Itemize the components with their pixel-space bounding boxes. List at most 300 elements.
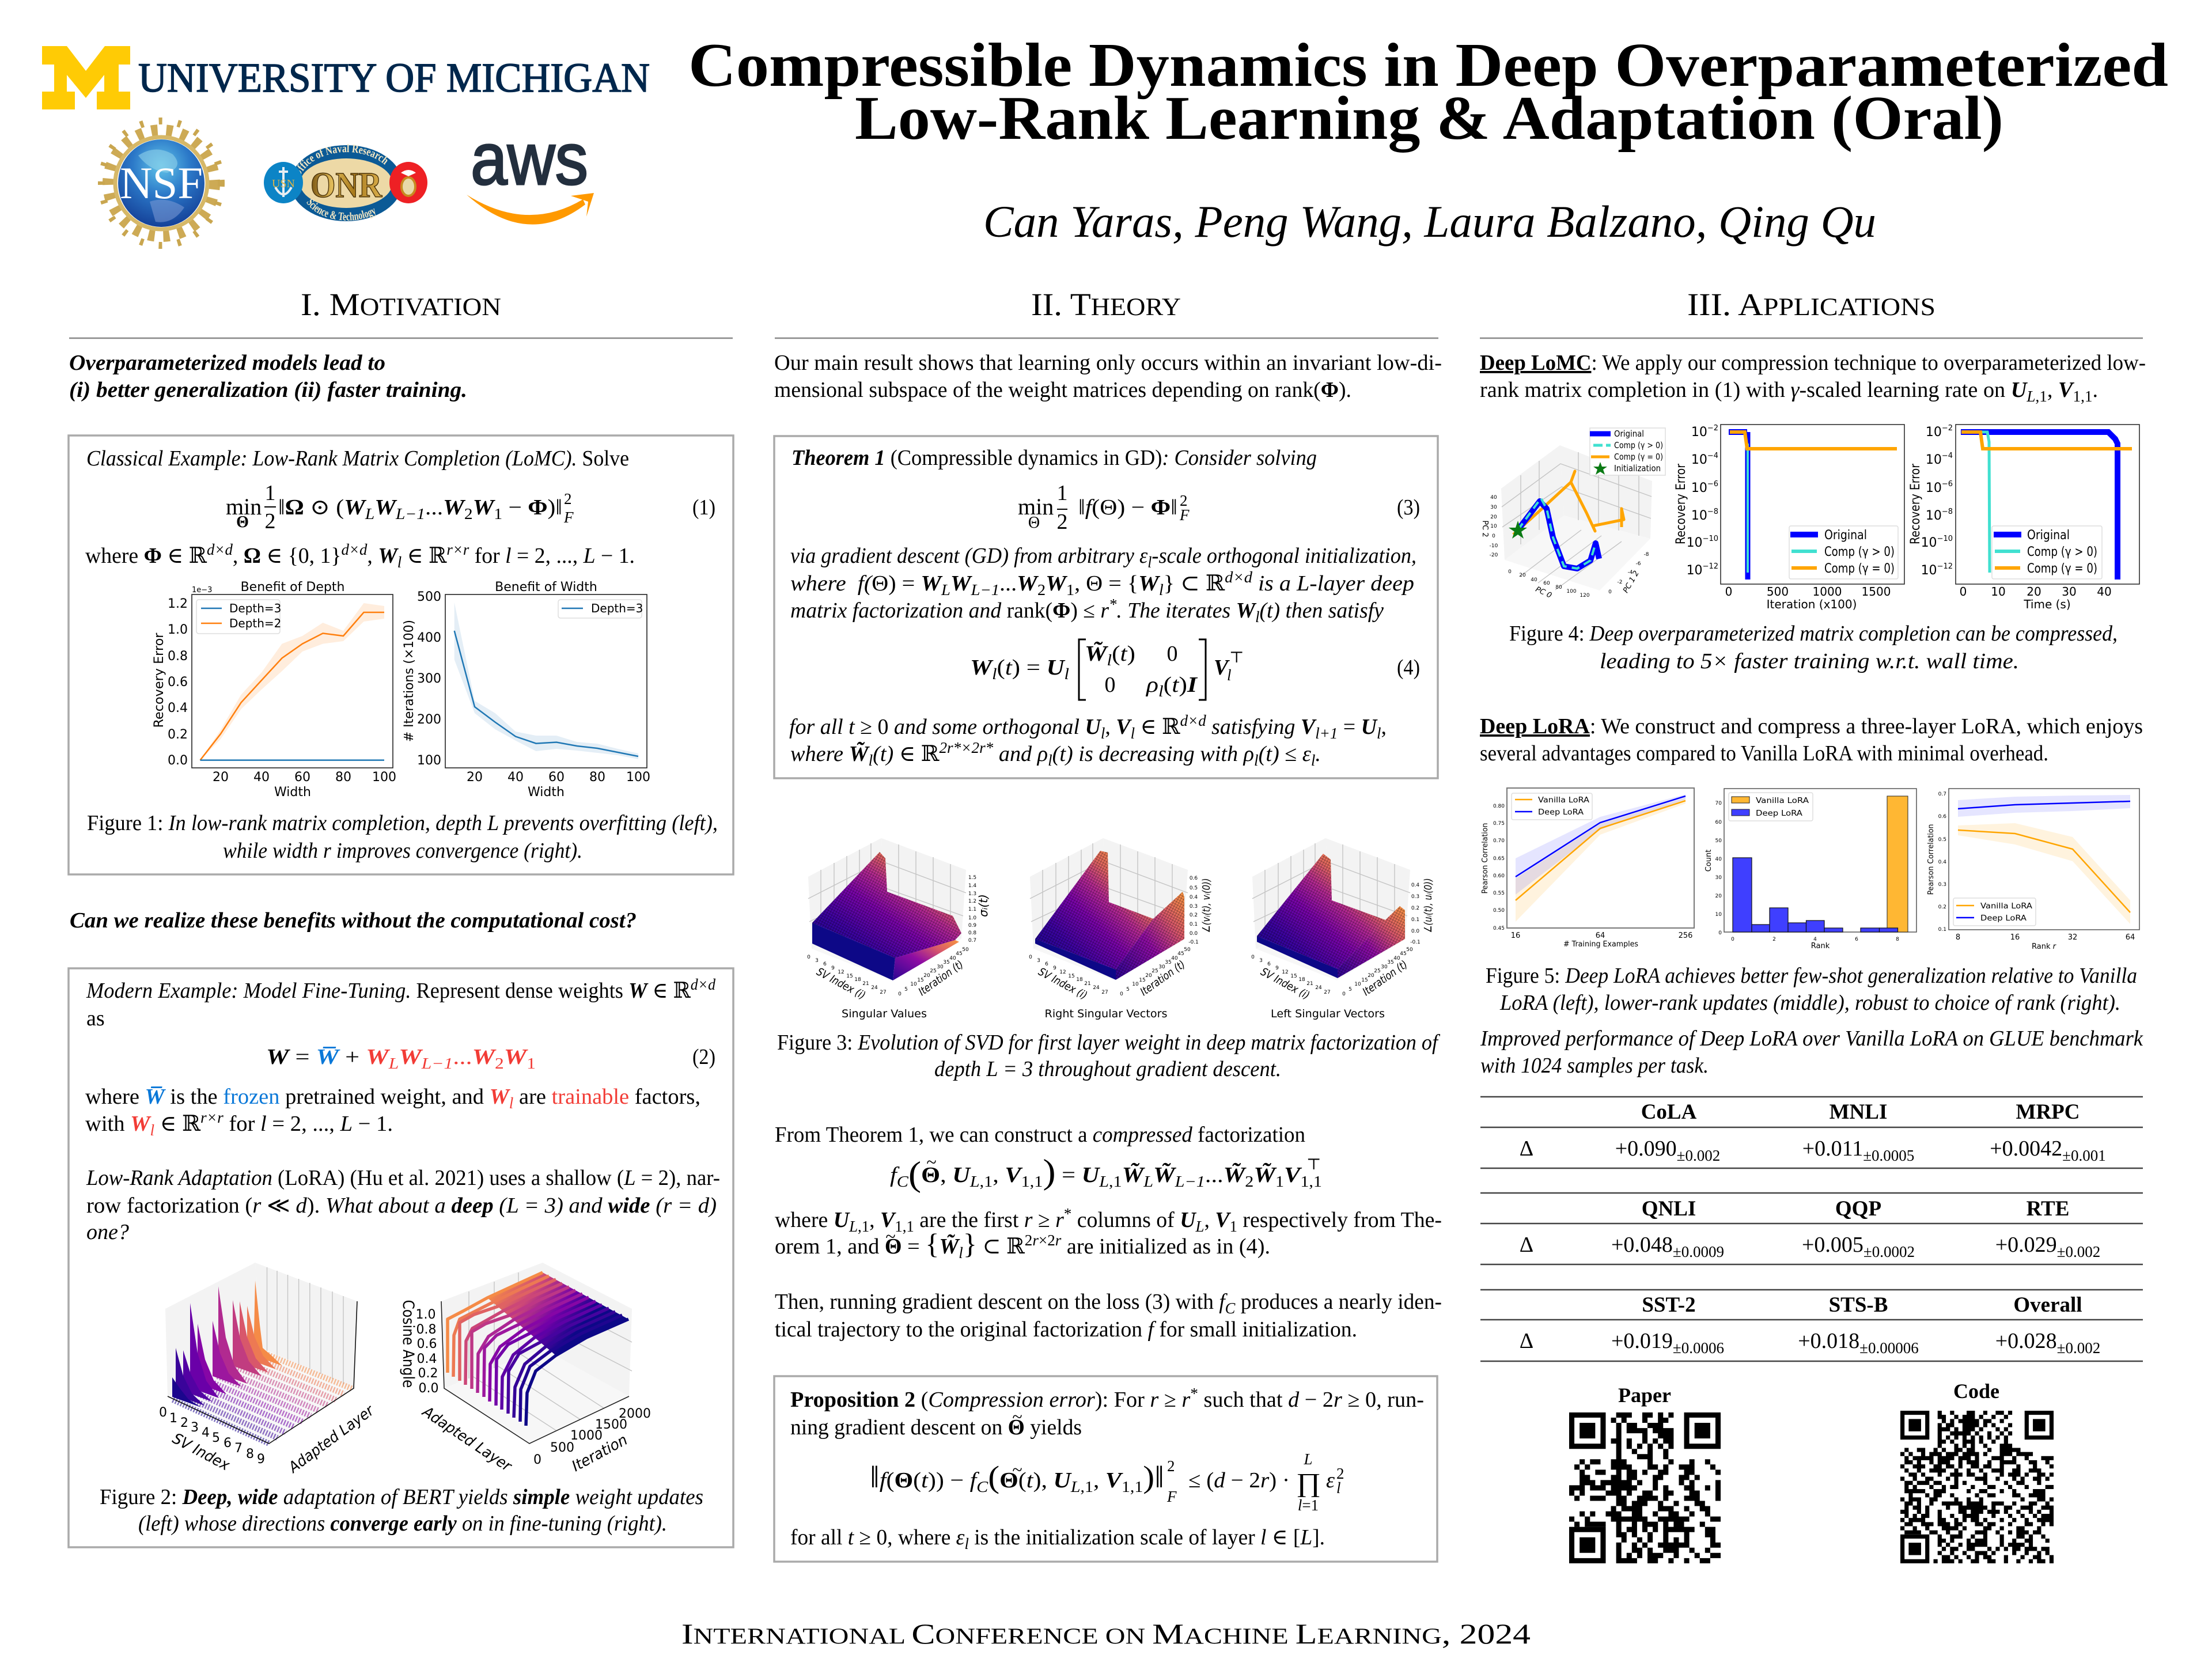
text block: main result <box>774 351 1442 402</box>
chart: 3D singular values of weight updates: 7 <box>234 1441 243 1456</box>
equation: compressed factorization: , <box>993 1163 1005 1187</box>
chart: rank histogram: 50 <box>1715 838 1722 844</box>
chart: 3D cosine angle over iterations: 0.8 <box>416 1323 437 1337</box>
chart: pearson vs training examples: 256 <box>1679 931 1692 940</box>
equation: compressed factorization: W̃ <box>1153 1163 1177 1187</box>
chart: singular values surface: 15 <box>846 974 853 979</box>
legend: Vanilla LoRA <box>1538 796 1589 805</box>
chart: left singular vectors surface: 0 <box>1251 955 1255 960</box>
chart: 3D cosine angle over iterations: 1500 <box>595 1418 627 1432</box>
chart: benefit of depth: 1.2 <box>168 597 188 611</box>
equation: compressed factorization: W̃ <box>1122 1163 1146 1187</box>
equation 4: t) = U <box>1005 656 1062 680</box>
legend: Original <box>1614 429 1644 439</box>
chart: recovery error vs time: 40 <box>2097 585 2112 599</box>
chart: right singular vectors surface: 15 <box>1068 974 1075 979</box>
equation 4: l <box>1227 666 1232 684</box>
chart: singular values surface: Singular Values <box>842 1007 927 1020</box>
chart: 3D cosine angle over iterations <box>399 1263 651 1476</box>
equation: compression error bound: ε <box>1326 1468 1335 1493</box>
chart: right singular vectors surface: 10 <box>1132 982 1139 987</box>
caption: figure 3: Figure 3: Evolution of SVD for first layer weight in deep matrix factorization of <box>777 1031 1440 1055</box>
chart: recovery error vs iteration: 10 <box>1687 536 1703 550</box>
chart: left singular vectors surface: 12 <box>1282 969 1289 975</box>
chart: recovery error vs time: −2 <box>1942 424 1953 433</box>
chart: singular values surface: 0 <box>807 955 810 960</box>
theorem conclusion: , <box>1381 715 1387 739</box>
text block: where: r ≥ r <box>1024 1208 1064 1232</box>
text block: where: ,1 <box>858 1218 869 1235</box>
equation 4: 0 <box>1167 642 1177 666</box>
theorem conclusion: and ρ <box>993 742 1048 766</box>
text block: where: where U <box>775 1208 849 1232</box>
equation 1: − <box>502 495 528 520</box>
equation: compression error bound: ≤ (d − 2r) · <box>1188 1468 1290 1493</box>
equation 1: 2 <box>464 505 473 522</box>
equation: compressed factorization: L <box>1143 1173 1153 1190</box>
caption: figure 5: Figure 5: Deep LoRA achieves better few-shot generalization relative to Vanilla <box>1486 964 2137 988</box>
theorem conclusion: ≤ ε <box>1285 742 1311 766</box>
text block: LoRA: Low-Rank Adaptation (LoRA) (Hu et al. 2021) uses a shallow (L = 2), nar- <box>86 1166 720 1190</box>
legend: Deep LoRA <box>1756 809 1802 818</box>
chart: 3D singular values of weight updates <box>159 1263 378 1477</box>
equation 2: L <box>388 1055 399 1072</box>
equation: compression error bound: 2 <box>1336 1465 1344 1482</box>
chart: right singular vectors surface: 3 <box>1037 958 1040 964</box>
chart: right singular vectors surface: 0 <box>1120 991 1123 997</box>
chart: recovery error vs time: −10 <box>1937 535 1953 543</box>
text block: where: L <box>1195 1218 1204 1235</box>
chart: 3D singular values of weight updates: SV Index <box>169 1430 233 1475</box>
theorem text: via gradient descent (GD) from arbitrary ε <box>790 544 1165 568</box>
chart: singular values surface: 3 <box>815 958 819 964</box>
chart: rank histogram: Count <box>1705 850 1713 872</box>
legend <box>1992 526 2102 579</box>
text block: LoRA: one? <box>86 1220 129 1244</box>
chart: pearson vs rank <box>1927 789 2139 951</box>
equation: compressed factorization: Θ <box>921 1163 940 1187</box>
legend: Depth=3 <box>229 601 281 615</box>
theorem conclusion: 2r*×2r* <box>939 739 994 756</box>
legend <box>1512 793 1592 820</box>
chart: benefit of depth: 0.6 <box>168 675 188 690</box>
equation: compression error bound: 2 <box>1167 1457 1175 1475</box>
chart: rank histogram: 6 <box>1855 937 1858 942</box>
row group: QNLI QQP RTE: ±0.0002 <box>1863 1243 1915 1260</box>
logo: NSF: NSF <box>120 158 203 208</box>
text block: frozen and trainable: l = 2, ..., L − 1. <box>260 1112 392 1136</box>
theorem text: d×d <box>1225 569 1253 586</box>
chart: recovery error vs time: 10 <box>1926 509 1942 523</box>
chart: left singular vectors surface: Left Singular Vectors <box>1271 1007 1385 1020</box>
chart: 3D trajectory PCA: 0 <box>1608 589 1612 595</box>
equation 2: W = W̅ + W <box>266 1045 385 1069</box>
chart: recovery error vs iteration: Recovery Error <box>1674 463 1688 544</box>
chart: benefit of depth: 1.0 <box>168 623 188 637</box>
equation 1: 2 <box>265 509 275 533</box>
text block: where: V <box>1215 1208 1231 1232</box>
text block: where: U <box>1180 1208 1197 1232</box>
chart: rank histogram: 8 <box>1896 937 1899 942</box>
chart: benefit of depth: 0.0 <box>168 753 188 768</box>
caption: figure 5: LoRA (left), lower-rank updates (middle), robust to choice of rank (right). <box>1499 991 2120 1015</box>
equation 4: (4) <box>1397 656 1420 680</box>
chart: singular values surface: 0.8 <box>968 930 976 936</box>
proposition conclusion: for all t ≥ 0, where ε <box>790 1525 965 1550</box>
chart: right singular vectors surface: 0.1 <box>1190 922 1198 927</box>
chart: left singular vectors surface: 20 <box>1368 973 1374 979</box>
theorem text: W <box>1046 571 1068 596</box>
equation: compressed factorization: V <box>1284 1163 1302 1187</box>
chart: rank histogram: 0 <box>1718 930 1722 936</box>
legend <box>1590 428 1665 475</box>
chart: pearson vs rank: 0.1 <box>1938 927 1946 933</box>
chart: 3D trajectory PCA: PC 0 <box>1534 585 1553 600</box>
chart: pearson vs rank: 0.4 <box>1938 859 1946 865</box>
chart: singular values surface: 50 <box>962 947 969 953</box>
equation: compressed factorization: f <box>890 1163 900 1187</box>
text block: compressed factorization: From Theorem 1, we can construct a compressed factorization <box>775 1123 1305 1147</box>
chart: benefit of width: 80 <box>589 770 605 785</box>
chart: left singular vectors surface: 15 <box>1290 974 1297 979</box>
theorem conclusion <box>789 712 1387 769</box>
text block: Deep LoMC: V <box>2058 378 2074 402</box>
text block: frozen and trainable: trainable factors, <box>552 1085 700 1109</box>
QR: paper <box>1569 1384 1721 1560</box>
chart: 3D singular values of weight updates: 4 <box>202 1426 210 1440</box>
theorem text: L−1 <box>971 581 999 599</box>
text block: where: L <box>849 1218 858 1235</box>
caption: figure 1: while width r improves convergence (right). <box>223 839 582 863</box>
equation 1: F <box>563 509 574 526</box>
row group: QNLI QQP RTE: +0.048 <box>1611 1233 1673 1257</box>
chart: recovery error vs time: 10 <box>1926 425 1942 440</box>
text block: Deep LoMC: rank matrix completion in (1) with γ-scaled learning rate on U <box>1480 378 2027 402</box>
chart: 3D cosine angle over iterations: 0 <box>533 1453 541 1467</box>
equation: compressed factorization: 2 <box>1245 1173 1253 1190</box>
text block: Deep LoMC: 1,1 <box>2073 388 2092 405</box>
chart: 3D singular values of weight updates: Adapted Layer <box>285 1402 378 1477</box>
text block: frozen and trainable: with W <box>85 1112 150 1136</box>
chart: benefit of width: 100 <box>417 753 441 768</box>
text block: compressed factorization: } <box>963 1228 977 1260</box>
equation 1 <box>226 481 715 533</box>
wordmark: UNIVERSITY OF MICHIGAN <box>138 55 650 101</box>
caption: figure 1: Figure 1: In low-rank matrix completion, depth L prevents overfitting (left), <box>87 811 718 835</box>
equation 4: ⊤ <box>1229 649 1244 666</box>
question: Can we realize these benefits without the computational cost? <box>70 908 637 933</box>
text block: compressed factorization <box>775 1123 1442 1342</box>
chart: rank histogram: 40 <box>1715 857 1722 862</box>
theorem conclusion: l <box>1254 752 1259 769</box>
text block: frozen and trainable: where W̅ is the frozen pretrained weight, and W <box>85 1085 509 1109</box>
theorem conclusion: satisfying <box>1206 715 1301 739</box>
chart: singular values surface: 45 <box>956 951 963 957</box>
row group: CoLA MNLI MRPC: MRPC <box>2016 1100 2080 1124</box>
chart: 3D trajectory PCA: -6 <box>1636 561 1641 567</box>
equation: compressed factorization: ) <box>1043 1153 1056 1191</box>
chart: pearson vs training examples: 0.60 <box>1493 873 1505 879</box>
equation: compressed factorization: ... <box>1205 1163 1224 1187</box>
title: Compressible Dynamics in Deep Overparameterized <box>688 31 2168 100</box>
text block: frozen and trainable: r×r <box>200 1109 224 1126</box>
title: Low-Rank Learning & Adaptation (Oral) <box>855 84 2003 153</box>
equation: compressed factorization: L <box>1099 1173 1109 1190</box>
equation 3: 2 <box>1180 492 1188 509</box>
equation 1: min <box>226 494 262 520</box>
chart: pearson vs rank: Pearson Correlation <box>1927 824 1936 895</box>
chart: right singular vectors surface: -0.1 <box>1188 940 1199 945</box>
chart: singular values surface: σᵢ(t) <box>976 894 990 917</box>
text block: GLUE benchmark: with 1024 samples per task. <box>1480 1054 1709 1078</box>
chart: singular values surface: 27 <box>880 990 887 995</box>
equation 1: 1 <box>265 481 275 505</box>
chart: recovery error vs iteration: −2 <box>1707 424 1718 433</box>
equation: compressed factorization: ⊤ <box>1306 1156 1321 1173</box>
legend: Depth=2 <box>229 616 281 630</box>
chart: pearson vs training examples: # Training Examples <box>1563 940 1638 949</box>
row group: QNLI QQP RTE: RTE <box>2027 1197 2069 1221</box>
chart: benefit of width: 100 <box>626 770 650 785</box>
chart: left singular vectors surface: 18 <box>1298 977 1305 983</box>
chart: right singular vectors surface: 6 <box>1045 961 1048 967</box>
equation: compression error bound: ‖f(Θ(t)) − f <box>870 1460 976 1494</box>
chart: singular values surface: 1.5 <box>968 875 976 881</box>
equation 4: 0 <box>1105 673 1115 697</box>
text block: frozen and trainable: l <box>509 1094 513 1112</box>
text block: where: V <box>880 1208 896 1232</box>
chart: pearson vs rank: 16 <box>2010 933 2020 942</box>
chart: singular values surface: 0.7 <box>968 938 976 944</box>
chart: 3D cosine angle over iterations: 0.0 <box>418 1381 439 1396</box>
equation: compression error bound: V <box>1105 1468 1123 1493</box>
chart: rank histogram: Rank <box>1811 942 1830 950</box>
chart: 3D cosine angle over iterations: Cosine Angle <box>399 1300 417 1388</box>
chart: singular values surface: 1.0 <box>968 915 976 921</box>
chart: rank histogram: 4 <box>1813 937 1817 942</box>
chart: 3D singular values of weight updates: 9 <box>257 1452 265 1467</box>
row group: CoLA MNLI MRPC: +0.090 <box>1615 1137 1677 1161</box>
proposition text: ning gradient descent on Θ yields <box>790 1415 1082 1440</box>
chart: left singular vectors surface: 40 <box>1393 956 1400 961</box>
chart: recovery error vs time <box>1908 424 2139 611</box>
chart: recovery error vs time: 0 <box>1960 585 1967 599</box>
equation: compressed factorization: 1,1 <box>1021 1173 1043 1190</box>
legend: Comp (γ = 0) <box>1824 562 1895 576</box>
row group: QNLI QQP RTE: Δ <box>1520 1233 1533 1257</box>
chart: recovery error vs time: 10 <box>1926 453 1942 467</box>
logo: NSF <box>101 121 221 245</box>
figure 3: SVD surfaces <box>777 838 1440 1081</box>
theorem text: } ⊂ ℝ <box>1164 571 1225 596</box>
chart: recovery error vs time: −12 <box>1937 562 1953 571</box>
equation: compression error bound: l=1 <box>1298 1497 1319 1514</box>
QR: code: Code <box>1953 1380 1999 1403</box>
text block: where: for <box>469 544 505 568</box>
theorem conclusion: (t) is decreasing with ρ <box>1052 742 1254 766</box>
text block: where: , <box>367 544 378 568</box>
chart: recovery error vs iteration: 10 <box>1691 509 1707 523</box>
chart: recovery error vs time: 10 <box>1926 481 1942 495</box>
chart: recovery error vs iteration: −4 <box>1707 452 1718 460</box>
chart: recovery error vs iteration: Iteration (x100) <box>1767 597 1857 611</box>
chart: left singular vectors surface: 30 <box>1381 964 1388 970</box>
chart: recovery error vs time: 10 <box>1921 563 1937 578</box>
text block: where: r×r <box>446 541 469 558</box>
theorem conclusion: , <box>1105 715 1116 739</box>
chart: 3D trajectory PCA: 0 <box>1492 533 1495 539</box>
row group: SST-2 STS-B Overall: Δ <box>1520 1329 1533 1353</box>
chart: singular values surface: 0.9 <box>968 923 976 929</box>
theorem conclusion: U <box>1361 715 1378 739</box>
theorem text: W <box>1017 571 1039 596</box>
chart: right singular vectors surface: 0.4 <box>1190 895 1198 900</box>
chart: 3D trajectory PCA: 120 <box>1580 593 1590 599</box>
text block: compressed factorization: tical trajectory to the original factorization f for small initialization. <box>775 1317 1357 1342</box>
chart: rank histogram: 60 <box>1715 820 1722 825</box>
legend: Vanilla LoRA <box>1980 902 2032 911</box>
equation: compression error bound: l <box>1336 1479 1341 1497</box>
chart: right singular vectors surface: 21 <box>1084 981 1091 987</box>
chart: benefit of width: Benefit of Width <box>495 580 597 594</box>
text block: Deep LoRA <box>1480 714 2143 766</box>
panel: proposition 2 <box>774 1376 1437 1562</box>
logo: ONR <box>264 144 427 221</box>
chart: left singular vectors surface: 21 <box>1306 981 1313 987</box>
text block: compressed factorization: l <box>959 1244 963 1262</box>
chart: right singular vectors surface: 20 <box>1145 973 1152 979</box>
proposition text: such that <box>1198 1388 1288 1412</box>
chart: singular values surface: 15 <box>917 978 924 983</box>
chart: right singular vectors surface <box>1029 838 1213 1020</box>
equation: compressed factorization <box>890 1152 1322 1193</box>
chart: recovery error vs iteration: 1000 <box>1813 585 1842 599</box>
text block: intro: Classical Example: Low-Rank Matrix Completion (LoMC). Solve <box>86 446 629 471</box>
equation 3: ‖f(Θ) − Φ‖ <box>1078 495 1177 520</box>
chart: singular values surface: 35 <box>943 960 950 965</box>
chart: pearson vs rank: 64 <box>2126 933 2135 942</box>
chart: right singular vectors surface: 12 <box>1059 969 1066 975</box>
chart: singular values surface: 6 <box>823 961 827 967</box>
legend: Comp (γ = 0) <box>1614 452 1663 462</box>
equation: compression error bound: C <box>976 1478 988 1495</box>
theorem text: W <box>950 571 973 596</box>
text block: where: ∈ ℝ <box>402 544 447 568</box>
chart: pearson vs training examples: 0.50 <box>1493 908 1505 914</box>
theorem text: l <box>1255 608 1260 626</box>
caption: figure 2: Figure 2: Deep, wide adaptation of BERT yields simple weight updates <box>100 1485 703 1509</box>
equation 4: ( <box>1112 642 1120 666</box>
chart: singular values surface: 30 <box>937 964 944 970</box>
chart: pearson vs rank: 0.5 <box>1938 837 1946 843</box>
chart: recovery error vs time: −6 <box>1942 480 1953 488</box>
chart: benefit of depth: 20 <box>213 770 229 785</box>
text block: frozen and trainable: are <box>513 1085 552 1109</box>
text block: where: where Φ ∈ ℝ <box>85 544 207 568</box>
text block: where: W <box>378 544 399 568</box>
panel: theorem 1 <box>774 436 1438 778</box>
chart: benefit of width: Width <box>528 785 565 800</box>
theorem text: ... <box>999 571 1017 596</box>
equation: compressed factorization: L−1 <box>1175 1173 1205 1190</box>
row group: SST-2 STS-B Overall: +0.028 <box>1995 1329 2057 1353</box>
chart: singular values surface: 40 <box>949 956 956 961</box>
caption: figure 2: (left) whose directions converge early on in fine-tuning (right). <box>138 1512 667 1536</box>
equation: compression error bound: ~ <box>1012 1459 1022 1480</box>
motivation statement: Overparameterized models lead to <box>69 351 385 375</box>
chart: singular values surface: 1.4 <box>968 883 976 889</box>
theorem text: L <box>941 581 950 599</box>
equation 2: 1 <box>527 1055 536 1072</box>
chart: left singular vectors surface: 0.4 <box>1411 882 1419 888</box>
equation 4: ( <box>1164 673 1172 697</box>
chart: 3D singular values of weight updates: 3 <box>191 1421 199 1435</box>
theorem conclusion: l <box>1101 725 1105 742</box>
text block: compressed factorization: orem 1, and Θ = {W̃ <box>775 1228 959 1260</box>
equation 4: l <box>992 665 997 683</box>
chart: pearson vs rank: 0.2 <box>1938 904 1946 910</box>
chart: recovery error vs time: 10 <box>1991 585 2006 599</box>
equation 4: ( <box>997 656 1005 680</box>
chart: recovery error vs iteration: 10 <box>1691 453 1707 467</box>
text block: LoRA <box>86 1166 720 1244</box>
chart: recovery error vs iteration: 0 <box>1725 585 1732 599</box>
heading: III. Applications: III. A PPLICATIONS <box>1687 287 1936 322</box>
chart: rank histogram: 30 <box>1715 875 1722 881</box>
equation 2 <box>266 1045 715 1072</box>
theorem conclusion: l <box>1131 725 1135 742</box>
equation 2: W <box>504 1045 529 1069</box>
chart: right singular vectors surface: 27 <box>1101 990 1108 995</box>
chart: pearson vs training examples: 0.70 <box>1493 838 1505 844</box>
chart: 3D trajectory PCA: -4 <box>1628 570 1633 575</box>
legend: Deep LoRA <box>1538 808 1584 817</box>
theorem conclusion: l+1 <box>1315 725 1338 742</box>
row group: CoLA MNLI MRPC: CoLA <box>1641 1100 1697 1124</box>
chart: left singular vectors surface: 6 <box>1267 961 1271 967</box>
chart: pearson vs rank: 8 <box>1956 933 1960 942</box>
chart: pearson vs rank: 0.3 <box>1938 882 1946 888</box>
chart: recovery error vs time: −8 <box>1942 507 1953 516</box>
equation 3: (3) <box>1397 495 1420 520</box>
legend <box>1789 526 1898 579</box>
chart: 3D cosine angle over iterations: 500 <box>550 1441 574 1455</box>
theorem text: l <box>1159 581 1164 599</box>
caption: figure 4 <box>1509 622 2118 673</box>
chart: left singular vectors surface: 24 <box>1315 985 1322 991</box>
proposition conclusion: l ∈ [L]. <box>1260 1525 1325 1550</box>
equation 3: 1 <box>1056 481 1068 505</box>
chart: singular values surface: Iteration (t) <box>916 958 966 998</box>
chart: benefit of depth <box>152 580 396 800</box>
legend <box>558 600 643 618</box>
chart: 3D trajectory PCA: 30 <box>1490 505 1497 510</box>
footer: conference: INTERNATIONAL CONFERENCE ON M ACHINE LEARNING , 2024 <box>681 1618 1531 1650</box>
row group: CoLA MNLI MRPC: +0.0042 <box>1990 1137 2062 1161</box>
row group: QNLI QQP RTE: +0.029 <box>1995 1233 2057 1257</box>
theorem conclusion: ∈ ℝ <box>1135 715 1180 739</box>
chart: benefit of depth: 40 <box>253 770 270 785</box>
chart: left singular vectors surface: 15 <box>1361 978 1368 983</box>
chart: singular values surface: 1.3 <box>968 891 976 897</box>
text block: frozen and trainable <box>85 1085 700 1139</box>
figure 4 <box>1480 424 2139 673</box>
title <box>688 31 2168 153</box>
row group: SST-2 STS-B Overall: ±0.00006 <box>1859 1339 1919 1357</box>
equation: compression error bound: 1,1 <box>1122 1478 1143 1495</box>
theorem conclusion: l <box>1048 752 1052 769</box>
row group: CoLA MNLI MRPC <box>1520 1100 2106 1164</box>
